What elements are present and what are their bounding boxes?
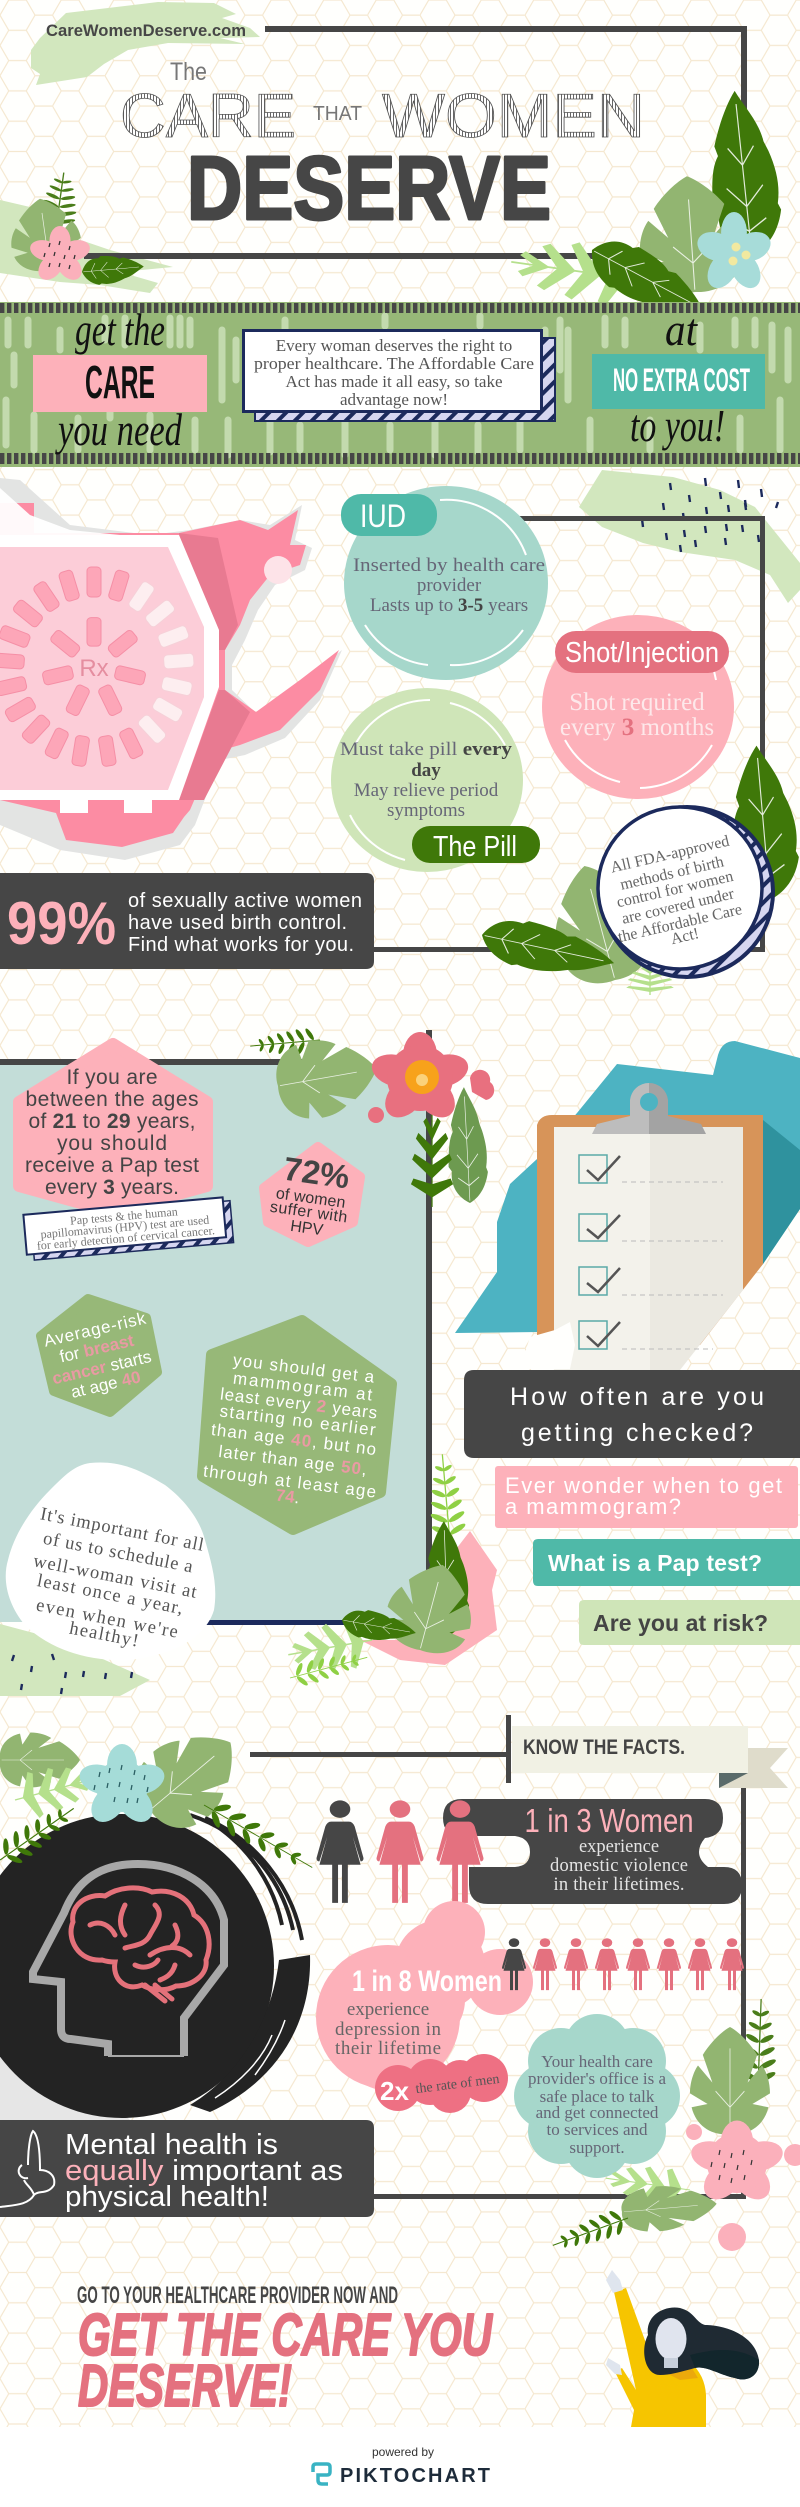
frame bbox=[250, 1715, 744, 2196]
green hexagon: mammogram bbox=[202, 1321, 391, 1529]
pink hexagon: Pap test: If you are bbox=[66, 1066, 158, 1089]
brush head circle bbox=[0, 1814, 310, 2118]
powered by: powered by bbox=[372, 2445, 434, 2459]
screening section bbox=[0, 1027, 800, 1696]
title frame bbox=[84, 29, 744, 256]
pink hexagon: 72% bbox=[264, 1147, 360, 1242]
green hexagon: average risk: for breast bbox=[58, 1331, 136, 1366]
pill circle: Must take pill every bbox=[340, 739, 513, 760]
dark heading box: getting checked? bbox=[521, 1419, 753, 1447]
teal scalloped badge: safe place to talk bbox=[540, 2087, 655, 2106]
teal question box: What is a Pap test? bbox=[548, 1550, 762, 1576]
piktochart wordmark: PIKTOCHART bbox=[340, 2465, 490, 2487]
pink hexagon: Pap test: you should bbox=[57, 1132, 167, 1155]
cta intro: GO TO YOUR HEALTHCARE PROVIDER NOW AND bbox=[77, 2282, 398, 2309]
shot circle: every 3 months bbox=[560, 714, 714, 741]
1 in 3 pictogram bbox=[316, 1800, 484, 1903]
pink blob: 1 in 8 women: depression in bbox=[335, 2019, 442, 2040]
green hexagon: mammogram: least every 2 years bbox=[219, 1384, 378, 1423]
pills bbox=[0, 567, 194, 767]
shot circle bbox=[542, 615, 734, 799]
pointing hand icon bbox=[0, 2131, 54, 2207]
grey shadow bbox=[0, 2050, 130, 2120]
pink blob: 1 in 8 women: their lifetime bbox=[335, 2038, 441, 2059]
teal scalloped badge: and get connected bbox=[536, 2103, 659, 2122]
green hexagon: mammogram: mammogram at bbox=[232, 1369, 374, 1405]
intro note bbox=[244, 330, 555, 421]
tilted note: HPV: for early detection of cervical cancer. bbox=[36, 1223, 215, 1253]
domestic violence card: 1 in 3 Women bbox=[524, 1802, 694, 1839]
title: DESERVE: DESERVE bbox=[187, 139, 551, 239]
covered note circle: All FDA-approved bbox=[609, 833, 731, 877]
domestic violence card: domestic violence bbox=[550, 1856, 688, 1876]
mental health box: equally important as bbox=[65, 2155, 343, 2187]
covered note circle: are covered under bbox=[620, 885, 736, 928]
stat box 99%: of sexually active women bbox=[128, 890, 362, 912]
know the facts banner: KNOW THE FACTS. bbox=[523, 1736, 685, 1759]
shot circle: Shot/Injection bbox=[565, 637, 719, 669]
pill circle: May relieve period bbox=[354, 780, 499, 801]
pink hexagon: Pap test: every 3 years. bbox=[45, 1176, 179, 1199]
floral cluster: bottom right bbox=[548, 1998, 800, 2258]
white blob: well-woman visit: of us to schedule a bbox=[41, 1529, 194, 1577]
green hexagon: mammogram: through at least age bbox=[202, 1462, 377, 1502]
text: to you: to you! bbox=[630, 400, 725, 451]
pink hexagon: 72%: 72% bbox=[281, 1150, 352, 1196]
brush dashes bbox=[6, 316, 788, 455]
covered note circle: the Affordable Care bbox=[616, 901, 744, 946]
pill circle: The Pill bbox=[433, 831, 517, 863]
stat box 99%: have used birth control. bbox=[128, 912, 347, 934]
clipboard paper bbox=[554, 1127, 650, 1370]
IUD circle: IUD bbox=[360, 498, 406, 534]
green hexagon: average risk: at age 40 bbox=[69, 1367, 142, 1402]
brush stroke lower left bbox=[0, 200, 173, 293]
pill pack illustration bbox=[0, 478, 342, 860]
green hexagon: average risk: Average-risk bbox=[42, 1309, 148, 1351]
green hexagon: average risk bbox=[41, 1299, 157, 1412]
title: THAT: THAT bbox=[313, 103, 362, 125]
dark heading box: How often are you bbox=[510, 1383, 764, 1411]
pink blob: 1 in 8 women: experience bbox=[347, 1999, 429, 2020]
2x rate blob: the rate of men bbox=[415, 2072, 500, 2097]
covered note circle: control for women bbox=[615, 868, 735, 911]
domestic violence card bbox=[443, 1799, 742, 1904]
green hexagon: mammogram: 74. bbox=[275, 1486, 301, 1507]
pink blob: 1 in 8 women bbox=[316, 1901, 533, 2090]
brush with ticks bottom left bbox=[0, 1624, 150, 1696]
mental health box bbox=[0, 2120, 374, 2217]
floral cluster: panel bottom right bbox=[284, 1453, 497, 1690]
tilted note: HPV: Pap tests & the human bbox=[69, 1204, 178, 1228]
floral cluster: panel top right bbox=[249, 1027, 494, 1207]
mint panel bbox=[0, 1064, 427, 1622]
domestic violence card: in their lifetimes. bbox=[554, 1875, 684, 1895]
IUD circle: Inserted by health care bbox=[353, 555, 545, 576]
teal scalloped badge: Your health care bbox=[541, 2052, 653, 2071]
intro note: advantage now! bbox=[340, 390, 448, 409]
mental health box: physical health! bbox=[65, 2181, 269, 2213]
covered note circle bbox=[598, 807, 773, 977]
pink hexagon: Pap test: of 21 to 29 years, bbox=[28, 1110, 196, 1133]
pill circle bbox=[331, 688, 540, 872]
green question box bbox=[579, 1600, 800, 1645]
stat box 99%: 99% bbox=[7, 890, 116, 957]
teal torn shape bbox=[455, 1041, 800, 1340]
shot circle: Shot required bbox=[569, 689, 705, 716]
tilted note: HPV bbox=[23, 1197, 234, 1261]
pink blob: 1 in 8 women: 1 in 8 Women bbox=[352, 1965, 502, 1998]
2x rate blob bbox=[375, 2054, 508, 2113]
floral cluster right bbox=[507, 87, 786, 330]
pink hexagon: 72%: of women bbox=[275, 1185, 346, 1212]
cta line 1: GET THE CARE YOU bbox=[78, 2302, 493, 2368]
floral cluster left bbox=[5, 170, 145, 286]
know the facts banner bbox=[512, 1726, 788, 1788]
panel frame bbox=[0, 1030, 429, 1600]
covered note circle: Act! bbox=[669, 925, 701, 948]
covered note circle: methods of birth bbox=[619, 853, 725, 894]
white blob: well-woman visit: least once a year, bbox=[35, 1571, 185, 1619]
1 in 8 pictogram bbox=[502, 1938, 744, 1990]
dark heading box bbox=[464, 1370, 800, 1458]
green hexagon: mammogram: starting no earlier bbox=[219, 1402, 377, 1440]
white blob: well-woman visit bbox=[6, 1462, 215, 1660]
brush with dots bbox=[579, 470, 800, 603]
text: you need: you need bbox=[55, 404, 183, 455]
torn white edge bbox=[520, 1322, 575, 1369]
teal scalloped badge: to services and bbox=[546, 2120, 648, 2139]
intro note: proper healthcare. The Affordable Care bbox=[254, 354, 534, 373]
title: WOMEN: WOMEN bbox=[382, 82, 645, 151]
teal scalloped badge: provider's office is a bbox=[528, 2069, 666, 2088]
IUD circle bbox=[341, 486, 548, 680]
green hexagon: mammogram: than age 40, but no bbox=[210, 1420, 377, 1459]
header section bbox=[0, 2, 786, 330]
woman illustration bbox=[606, 2270, 759, 2427]
pill circle: day bbox=[411, 760, 441, 781]
green question box: Are you at risk? bbox=[593, 1610, 768, 1636]
title: CARE: CARE bbox=[120, 82, 296, 151]
IUD circle: Lasts up to 3-5 years bbox=[370, 595, 528, 616]
text: at: at bbox=[665, 304, 698, 355]
floral crown bbox=[0, 1710, 319, 1879]
green banner bbox=[0, 302, 800, 467]
teal scalloped badge bbox=[514, 2014, 680, 2178]
pink box: CARE: CARE bbox=[85, 356, 155, 408]
stat box 99% bbox=[0, 873, 374, 969]
tilted note: HPV: papillomavirus (HPV) test are used bbox=[40, 1213, 210, 1241]
IUD circle: provider bbox=[417, 575, 482, 596]
stat box 99%: Find what works for you. bbox=[128, 934, 354, 956]
2x rate blob: 2x bbox=[380, 2076, 410, 2106]
pink box: CARE bbox=[33, 355, 207, 412]
intro note: Act has made it all easy, so take bbox=[286, 372, 502, 391]
green hexagon: mammogram: later than age 50, bbox=[218, 1442, 368, 1479]
clipboard board bbox=[537, 1115, 763, 1345]
check items bbox=[579, 1155, 723, 1349]
white blob: well-woman visit: well-woman visit at bbox=[32, 1551, 199, 1603]
pink question box: a mammogram? bbox=[505, 1494, 681, 1519]
brush stroke behind website bbox=[31, 2, 260, 85]
pink hexagon: Pap test bbox=[19, 1044, 207, 1212]
teal question box bbox=[533, 1539, 800, 1586]
pink hexagon: Pap test: receive a Pap test bbox=[25, 1154, 199, 1177]
green hexagon: mammogram: you should get a bbox=[232, 1350, 376, 1387]
title: The: The bbox=[170, 58, 207, 86]
clip bbox=[592, 1083, 706, 1134]
pink question box bbox=[495, 1466, 798, 1528]
pink hexagon: Pap test: between the ages bbox=[26, 1088, 198, 1111]
mental health box: Mental health is bbox=[65, 2129, 278, 2161]
white blob: well-woman visit: healthy! bbox=[68, 1619, 140, 1652]
brain icon bbox=[71, 1888, 209, 2001]
pink hexagon: 72%: HPV bbox=[289, 1218, 324, 1239]
pill circle: symptoms bbox=[387, 800, 465, 821]
piktochart logo bbox=[313, 2464, 330, 2484]
text: get the: get the bbox=[75, 304, 165, 355]
cta line 2: DESERVE! bbox=[78, 2353, 292, 2419]
footer bbox=[313, 2445, 490, 2487]
domestic violence card: experience bbox=[579, 1837, 659, 1857]
intro note: Every woman deserves the right to bbox=[276, 336, 512, 355]
green hexagon: average risk: cancer starts bbox=[50, 1347, 153, 1388]
clipboard shadow bbox=[763, 1120, 800, 1264]
pink question box: Ever wonder when to get bbox=[505, 1473, 782, 1498]
birth control section bbox=[0, 470, 800, 995]
teal scalloped badge: support. bbox=[569, 2138, 625, 2157]
white blob: well-woman visit: even when we're bbox=[34, 1596, 180, 1643]
teal box: no extra cost bbox=[592, 354, 765, 409]
frame bbox=[373, 518, 762, 950]
mental health section bbox=[0, 1710, 800, 2258]
leaves cluster bbox=[477, 743, 800, 995]
website text: CareWomenDeserve.com bbox=[46, 21, 246, 40]
clipboard illustration bbox=[455, 1041, 800, 1370]
white blob: well-woman visit: It's important for all bbox=[39, 1504, 205, 1556]
head outline icon bbox=[33, 1864, 224, 2056]
call to action bbox=[77, 2270, 759, 2427]
pink hexagon: 72%: suffer with bbox=[269, 1199, 348, 1226]
Rx mark: Rx bbox=[79, 655, 109, 682]
